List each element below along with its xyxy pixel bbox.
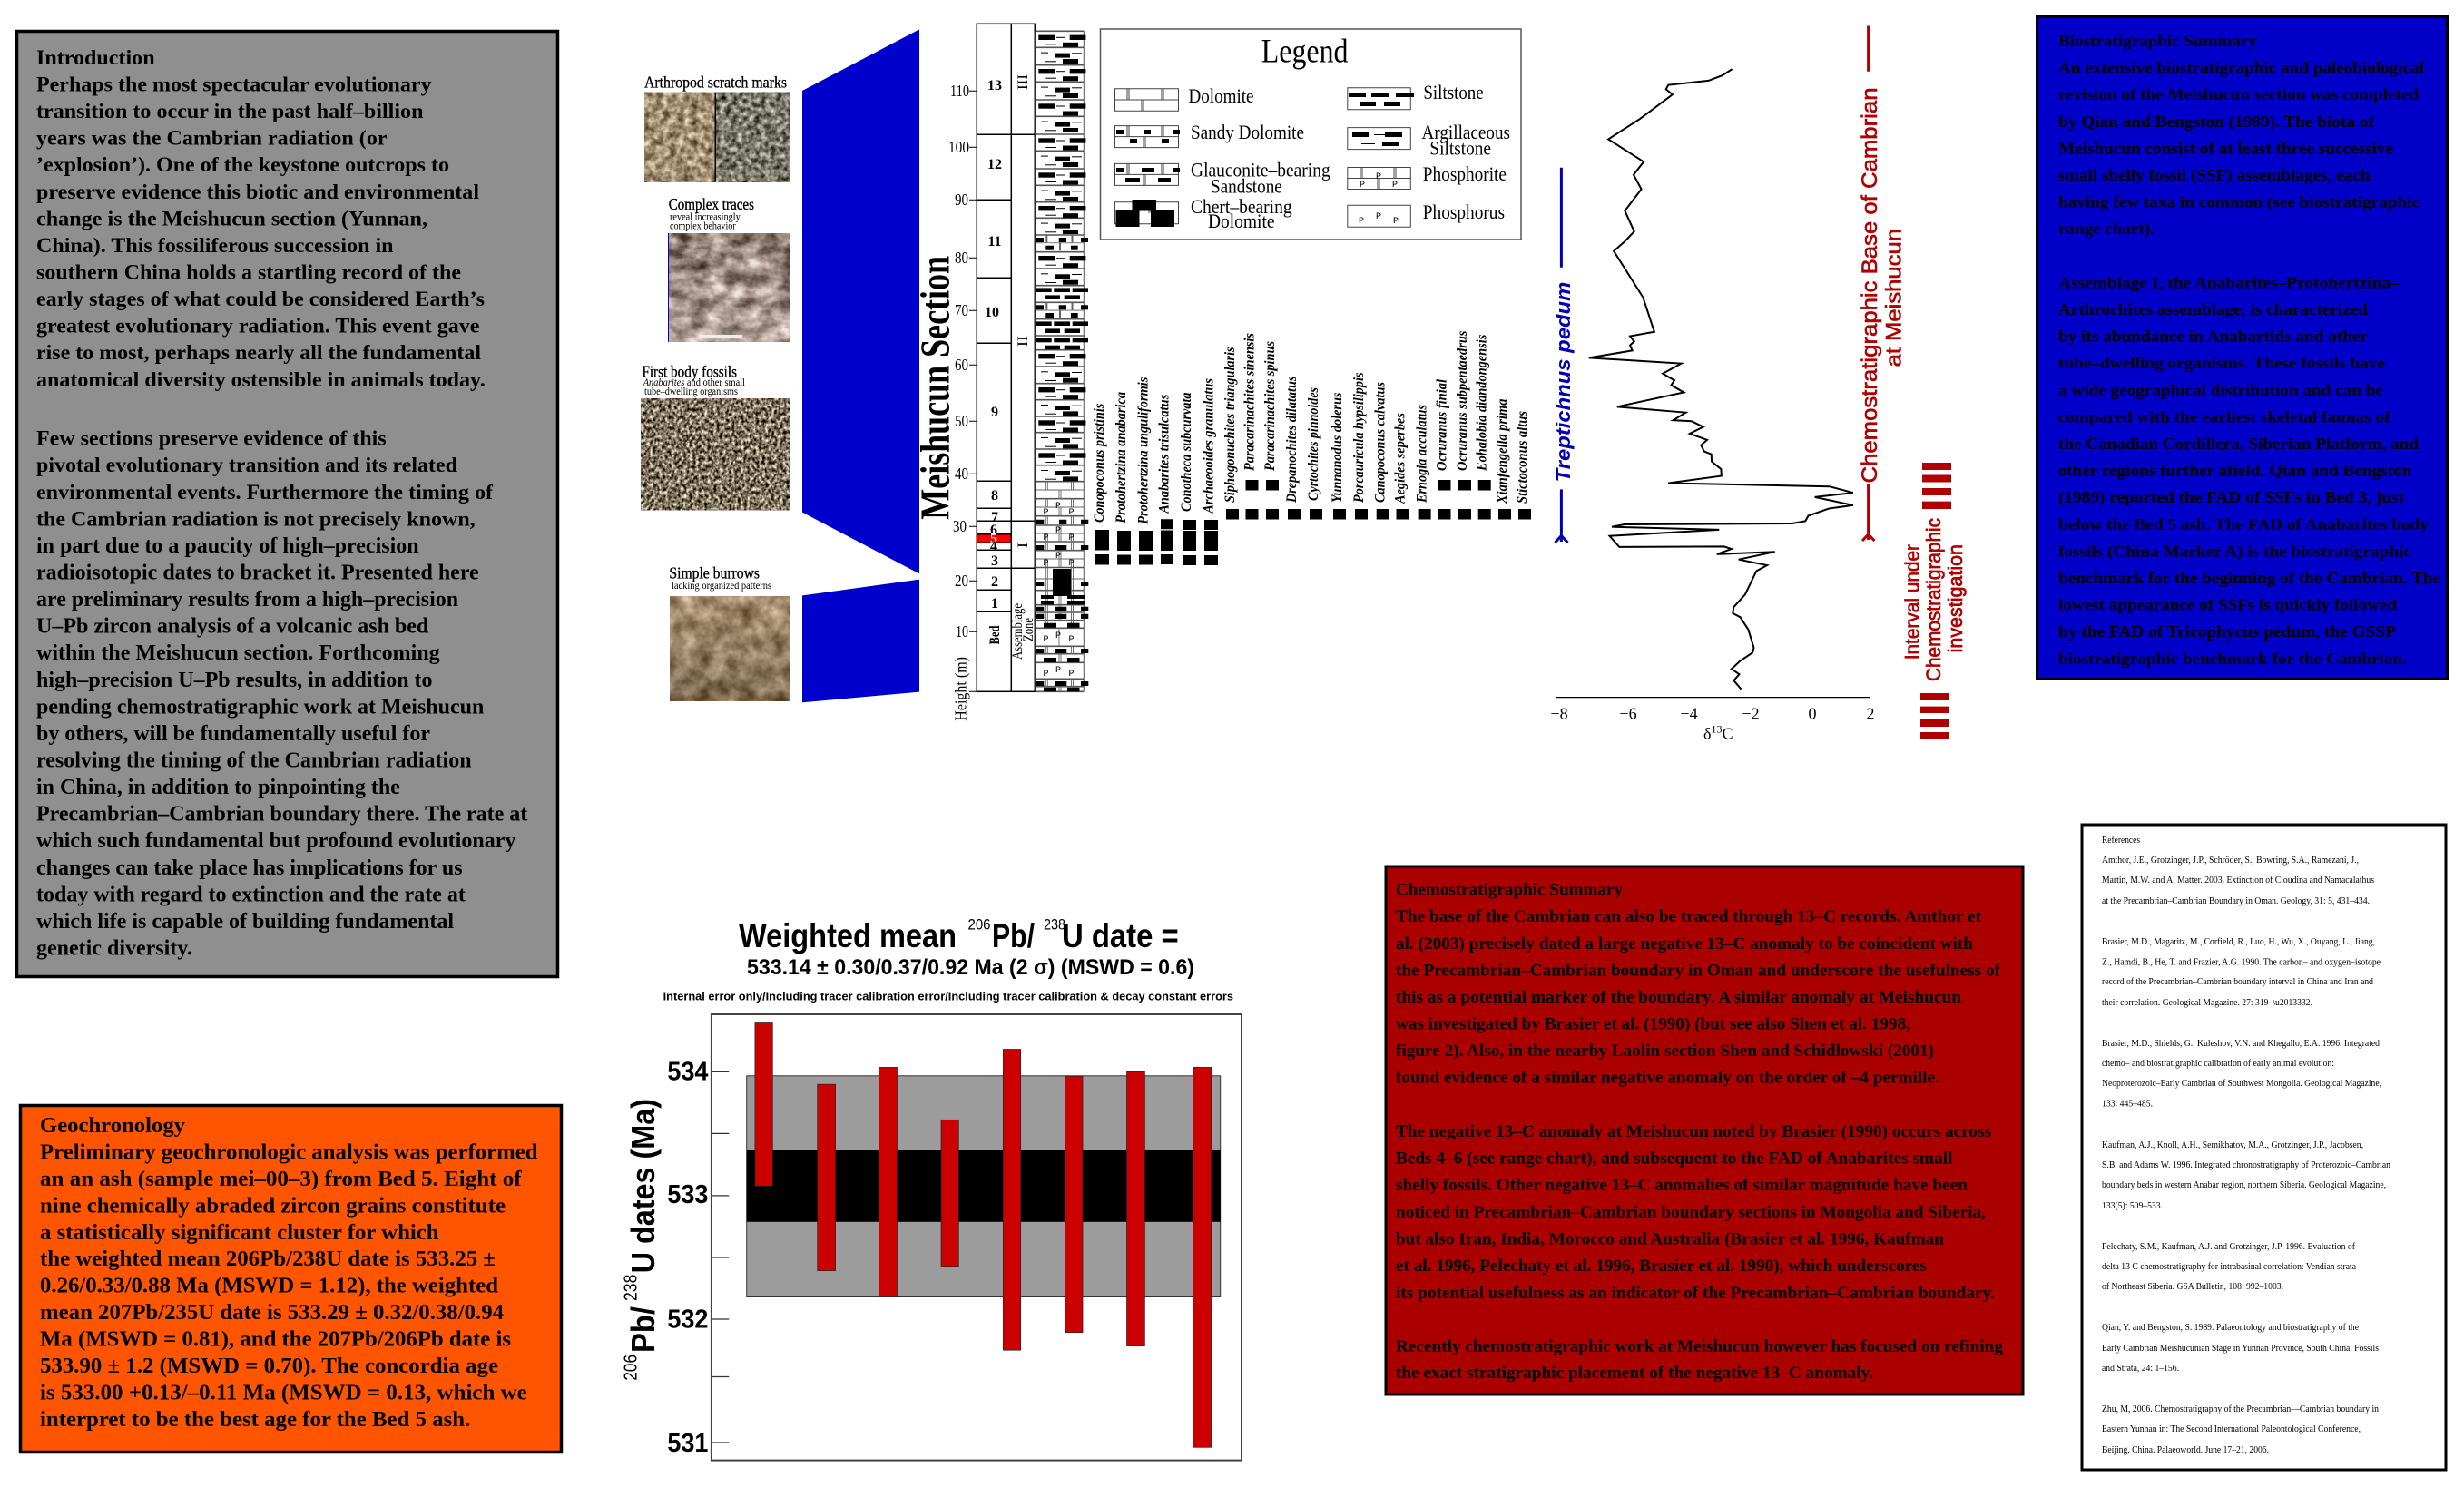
legend labels: Argillaceous [1421,121,1510,143]
text block: geochronology: interpret to be the best age for the Bed 5 ash. [40,1407,470,1432]
text block: biostratigraphic summary: Assemblage I, the Anabarites–Protohertzina– [2058,273,2400,291]
text block: geochronology: nine chemically abraded zircon grains constitute [40,1193,506,1218]
date axis title: 238 [621,1275,641,1301]
lithology phosphate symbols: P [1043,635,1049,645]
text block: introduction paragraphs: changes can take place has implications for us [36,856,463,880]
isotope axis: 13 [1711,723,1722,736]
chart heading: weighted mean date: U date = [1062,917,1179,954]
text block: reference list: Zhu, M, 2006. Chemostratigraphy of the Precambrian––Cambrian boundary in [2102,1404,2379,1414]
text block: geochronology: mean 207Pb/235U date is 533.29 ± 0.32/0.38/0.94 [40,1300,504,1325]
chart: carbon isotope curve [1550,69,1875,743]
zone labels: Zone [1021,618,1036,641]
zone labels: Assemblage [1010,603,1026,660]
range chart: taxa names: Protohertzina unguliformis [1136,377,1151,525]
text block: introduction paragraphs: Precambrian–Cambrian boundary there. The rate at [36,803,527,827]
text block: introduction paragraphs: early stages of what could be considered Earth’s [36,288,485,310]
lithology phosphate symbols: P [1055,526,1061,536]
text block: reference list: Martin, M.W. and A. Matter. 2003. Extinction of Cloudina and Namacalathus [2102,875,2374,885]
bed numbers: 9 [991,405,998,420]
photo: arthropod scratch marks [644,73,790,182]
lithology phosphate symbols: P [1055,552,1061,562]
text block: chemostratigraphic summary: Beds 4–6 (see range chart), and subsequent to the FAD of Anabarites small [1396,1149,1953,1169]
text block: reference list: Neoproterozoic–Early Cambrian of Southwest Mongolia. Geological Magazine, [2102,1078,2381,1089]
text block: geochronology: 533.90 ± 1.2 (MSWD = 0.70). The concordia age [40,1354,498,1378]
chart note: error types: Internal error only/Including tracer calibration error/Including tracer calibration & decay constant errors [663,991,1233,1003]
text block: geochronology: the weighted mean 206Pb/238U date is 533.25 ± [40,1247,496,1271]
legend labels: Sandy Dolomite [1191,121,1304,143]
text block: chemostratigraphic summary: this as a potential marker of the boundary. A similar anomaly at Meishucun [1396,988,1961,1007]
isotope axis: C [1722,725,1733,743]
text block: chemostratigraphic summary: et al. 1996, Pelechaty et al. 1996, Brasier et al. 1990), which underscores [1396,1257,1927,1276]
range chart: taxa names: Porcauricula hypsilippis [1351,373,1367,504]
range chart: taxa names: Stictoconus altus [1515,411,1530,504]
isotope axis: −4 [1680,704,1698,722]
column header: bed: Bed [987,625,1003,644]
lithology phosphate symbols: P [1055,666,1061,676]
legend labels: Dolomite [1189,84,1254,107]
text block: reference list: Pelechaty, S.M., Kaufman, A.J. and Grotzinger, J.P. 1996. Evaluation of [2102,1241,2355,1252]
text block: biostratigraphic summary: other regions further afield. Qian and Bengston [2058,462,2412,480]
text block: introduction paragraphs: are preliminary results from a high–precision [36,588,458,611]
range chart: taxa names: Drepanochites dilatatus [1284,377,1300,504]
text block: introduction paragraphs [36,73,527,960]
isotope axis: −6 [1619,704,1637,722]
2-sigma gray band [747,1076,1221,1297]
lithology phosphate symbols: P [1043,533,1049,543]
text block: introduction paragraphs: change is the Meishucun section (Yunnan, [36,207,427,230]
date axis ticks and labels [667,1057,729,1458]
text block: biostratigraphic summary: (1989) reported the FAD of SSFs in Bed 3, just [2058,488,2404,507]
isotope axis: −2 [1742,704,1760,722]
text block: reference list: 133: 445–485. [2102,1098,2153,1109]
text block: reference list: delta 13 C chemostratigraphy for intrabasinal correlation: Vendian strata [2102,1261,2356,1272]
photo: complex traces: reveal increasingly [670,210,741,223]
text block: chemostratigraphic summary: its potential usefulness as an indicator of the Precambrian–Cambrian boundary. [1396,1284,1995,1303]
text block: reference list: their correlation. Geological Magazine. 27: 319–\u2013332. [2102,997,2312,1008]
chart heading: weighted mean date [739,916,1179,954]
text block: chemostratigraphic summary: The base of the Cambrian can also be traced through 13–C records. Amthor et [1396,907,1982,926]
text block: introduction paragraphs: today with regard to extinction and the rate at [36,883,466,906]
panel: introduction [16,31,557,976]
zone labels: II [1016,336,1031,347]
date axis title: 206 [621,1355,641,1381]
date axis ticks and labels: 533 [667,1180,708,1209]
text block: reference list: Early Cambrian Meishucunian Stage in Yunnan Province, South China. Fossils [2102,1343,2379,1354]
text block: chemostratigraphic summary: Recently chemostratigraphic work at Meishucun however has focused on refining [1396,1337,2003,1356]
photo: first body fossils: Anabarites and other small [643,376,746,388]
heading: introduction: Introduction [36,46,155,69]
legend labels: Siltstone [1429,137,1491,160]
height axis ticks and labels: 110 [950,82,969,100]
text block: reference list: Brasier, M.D., Shields, G., Kuleshov, V.N. and Khegallo, E.A. 1996. Integrated [2102,1038,2380,1049]
annotation: interval under investigation [1901,463,1967,739]
isotope axis: 0 [1808,704,1817,722]
lithology phosphate symbols: P [1043,670,1049,680]
stratigraphic column: beds and zones [948,24,1036,721]
height axis ticks and labels: 30 [953,517,967,535]
chart heading: weighted mean date: 238 [1044,916,1065,933]
text block: introduction paragraphs: Perhaps the most spectacular evolutionary [36,73,432,96]
height axis ticks and labels: 40 [955,465,968,483]
zircon date error bars [755,1023,1212,1447]
text block: biostratigraphic summary: Arthrochites assemblage, is characterized [2058,300,2368,318]
axis label: height: Height (m) [952,657,971,721]
range chart: taxa names: Xianfengella prima [1495,399,1510,504]
text block: introduction paragraphs: pending chemostratigraphic work at Meishucun [36,695,484,719]
text block: introduction paragraphs: genetic diversity. [36,936,192,960]
range chart: taxa names: Conopoconus pristinis [1092,404,1107,523]
range chart: occurrence squares [1095,480,1531,565]
text block: reference list: Kaufman, A.J., Knoll, A.H., Semikhatov, M.A., Grotzinger, J.P., Jacobsen, [2102,1140,2363,1150]
range chart: taxa names: Canopoconus calvatus [1373,382,1389,503]
text block: reference list: and Strata, 24: 1–156. [2102,1363,2179,1374]
text block: introduction paragraphs: U–Pb zircon analysis of a volcanic ash bed [36,615,429,639]
connector: Cambrian interval wedge [802,29,919,573]
isotope axis: 2 [1866,704,1875,722]
text block: introduction paragraphs: pivotal evolutionary transition and its related [36,454,457,476]
text block: reference list: record of the Precambrian–Cambrian boundary interval in China and Iran and [2102,976,2373,987]
height axis ticks and labels [948,82,977,691]
text block: introduction paragraphs: environmental events. Furthermore the timing of [36,481,493,504]
range chart: taxa names: Eohalobia diandongensis [1475,335,1490,472]
text block: chemostratigraphic summary: the exact stratigraphic placement of the negative 13–C anomaly. [1396,1364,1873,1383]
legend labels: Siltstone [1423,81,1484,103]
date axis title: Pb/ [624,1306,662,1353]
text block: reference list: Z., Hamdi, B., He, T. and Frazier, A.G. 1990. The carbon– and oxygen–isotope [2102,956,2381,967]
text block: biostratigraphic summary: fossils (China Marker A) is the biostratigraphic [2058,542,2411,561]
text block: biostratigraphic summary: range chart). [2058,220,2155,239]
height axis ticks and labels: 10 [956,622,968,641]
range chart: taxa names: Anabarites trisulcatus [1157,395,1173,514]
text block: biostratigraphic summary: having few taxa in common (see biostratigraphic [2058,193,2420,212]
lithology phosphate symbols: P [1068,635,1075,645]
lithology phosphate symbols: P [1055,631,1061,641]
height axis ticks and labels: 90 [955,191,968,209]
legend labels: Chert–bearing [1191,195,1292,218]
text block: reference list: at the Precambrian–Cambrian Boundary in Oman. Geology, 31: 5, 431–434. [2102,895,2370,906]
legend labels: Phosphorite [1423,162,1507,185]
heading: geochronology: Geochronology [40,1113,186,1138]
text block: introduction paragraphs: within the Meishucun section. Forthcoming [36,641,440,665]
range chart: taxa names [1092,331,1530,525]
text block: introduction paragraphs: Few sections preserve evidence of this [36,427,387,450]
bed numbers: 12 [987,157,1002,172]
height axis ticks and labels: 100 [948,138,969,156]
text block: chemostratigraphic summary: shelly fossils. Other negative 13–C anomalies of similar magnitude have been [1396,1176,1968,1195]
text block: biostratigraphic summary: small shelly fossil (SSF) assemblages, each [2058,166,2371,185]
text block: introduction paragraphs: years was the Cambrian radiation (or [36,127,387,150]
range chart: taxa names: Siphogonuchites triangularis [1222,347,1238,503]
date axis title: U dates (Ma) [624,1099,662,1273]
text block: biostratigraphic summary: An extensive biostratigraphic and paleobiological [2058,58,2424,76]
photo: complex traces: Complex traces [669,195,754,213]
bed numbers: 5 [990,532,997,546]
text block: geochronology [40,1140,538,1432]
lithology phosphate symbols: P [1043,508,1049,518]
legend swatches: P [1376,212,1381,222]
legend swatches: P [1392,181,1398,191]
lithology phosphate symbols: P [1055,502,1061,512]
text block: introduction paragraphs: the Cambrian radiation is not precisely known, [36,507,476,530]
photo: simple burrows: lacking organized patterns [672,579,771,592]
annotation: chemostratigraphic base of Cambrian [1858,25,1906,541]
text block: introduction paragraphs: by others, will be fundamentally useful for [36,722,430,746]
text block: introduction paragraphs: resolving the timing of the Cambrian radiation [36,749,472,773]
zone labels: I [1016,543,1031,548]
legend swatches: P [1359,217,1364,227]
connector: lower interval wedge [802,580,919,702]
legend swatches: P [1376,172,1381,182]
text block: geochronology: is 533.00 +0.13/–0.11 Ma (MSWD = 0.13, which we [40,1381,527,1404]
photo: simple burrows: Simple burrows [669,564,760,582]
range chart: taxa names: Ocruranus subpentaedrus [1455,331,1470,471]
range chart: taxa names: Ernogia acculatus [1415,405,1430,504]
text block: biostratigraphic summary: benchmark for the beginning of the Cambrian. The [2058,569,2440,587]
text block: chemostratigraphic summary: figure 2). Also, in the nearby Laolin section Shen and Schidlowski (2001) [1396,1042,1934,1061]
zone labels [1010,74,1036,660]
text block: biostratigraphic summary: by its abundance in Anabartids and other [2058,328,2368,346]
range chart: taxa names: Yunnanodus dolerus [1330,392,1345,503]
photo: arthropod scratch marks: Arthropod scratch marks [644,73,787,92]
text block: biostratigraphic summary: compared with the earliest skeletal faunas of [2058,407,2391,426]
range chart: taxa names: Aegides seperbes [1392,413,1409,504]
bed numbers [985,78,1002,611]
bed numbers: 3 [991,553,998,569]
height axis ticks and labels: 70 [955,301,968,319]
text block: geochronology: a statistically significant cluster for which [40,1220,439,1245]
text block: introduction paragraphs: in China, in addition to pinpointing the [36,776,400,799]
annotation: chemostratigraphic base of Cambrian: Chemostratigraphic Base of Cambrian [1858,87,1882,483]
photo: simple burrows [669,564,790,701]
text block: introduction paragraphs: which such fundamental but profound evolutionary [36,829,515,853]
lithologic column [1036,31,1088,691]
range chart: taxa names: Ocruranus finial [1434,378,1450,471]
bed numbers: 8 [991,488,998,504]
text block: introduction paragraphs: which life is capable of building fundamental [36,910,454,934]
text block: reference list: Eastern Yunnan in: The Second International Paleontological Conference, [2102,1423,2361,1434]
legend labels: Dolomite [1208,210,1274,232]
text block: chemostratigraphic summary: The negative 13–C anomaly at Meishucun noted by Brasier (1990) occurs across [1396,1122,1991,1141]
photo: first body fossils: First body fossils [642,363,737,381]
lithology phosphate symbols: P [1068,533,1075,543]
text block: introduction paragraphs: China). This fossiliferous succession in [36,234,394,257]
annotation: interval under investigation: Chemostratigraphic [1922,518,1945,681]
range chart: taxa names: Cyrtochites pinnoides [1306,387,1321,501]
chart subtitle: date result: 533.14 ± 0.30/0.37/0.92 Ma (2 σ) (MSWD = 0.6) [747,955,1194,980]
date axis ticks and labels: 532 [667,1305,708,1334]
text block: reference list: of Northeast Siberia. GSA Bulletin, 108: 992–1003. [2102,1281,2283,1292]
legend title: Legend [1261,34,1349,71]
date axis ticks and labels: 534 [667,1057,708,1086]
heading: references: References [2102,835,2140,846]
text block: biostratigraphic summary: a wide geographical distribution and can be [2058,381,2383,399]
annotation: interval under investigation: Interval under [1901,544,1924,660]
range chart: taxa names: Paracarinachites spinus [1262,341,1278,472]
annotation: interval under investigation: investigation [1944,544,1967,652]
bed numbers: 10 [985,305,999,320]
lithology phosphate symbols: P [1068,670,1075,680]
range chart: taxa names: Archaeooides granulatus [1201,378,1216,514]
bed numbers: 1 [991,596,998,611]
photo: first body fossils [641,363,790,510]
date axis ticks and labels: 531 [667,1429,708,1458]
text block: biostratigraphic summary: lowest appearance of SSFs is quickly followed [2058,596,2397,614]
legend [1100,29,1521,240]
text block: biostratigraphic summary: below the Bed 5 ash. The FAD of Anabarites body [2058,515,2429,533]
date axis title [621,1099,662,1381]
text block: reference list: boundary beds in western Anabar region, northern Siberia. Geological Magazine, [2102,1179,2386,1190]
legend labels: Phosphorus [1423,201,1505,223]
text block: chemostratigraphic summary: found evidence of a similar negative anomaly on the order of –4 permille. [1396,1069,1939,1088]
text block: introduction paragraphs: in part due to a paucity of high–precision [36,534,419,558]
height axis ticks and labels: 20 [955,572,968,590]
text block: geochronology: Preliminary geochronologic analysis was performed [40,1140,538,1165]
text block: chemostratigraphic summary [1396,907,2003,1383]
annotation: chemostratigraphic base of Cambrian: at Meishucun [1881,229,1906,367]
text block: chemostratigraphic summary: the Precambrian–Cambrian boundary in Oman and underscore the usefulness of [1396,961,2001,980]
height axis ticks and labels: 60 [955,356,968,374]
panel: biostratigraphic summary [2037,16,2447,679]
text block: introduction paragraphs: transition to occur in the past half–billion [36,100,424,122]
height axis ticks and labels: 50 [955,412,968,430]
lithology phosphate symbols: P [1068,559,1075,569]
bed numbers: 2 [991,574,998,590]
range chart: taxa names: Paracarinachites sinensis [1242,333,1258,472]
bed numbers: 11 [987,234,1002,249]
bed numbers: 7 [991,510,998,525]
range chart: taxa names: Conotheca subcurvata [1179,392,1194,512]
legend swatches: P [1393,217,1399,227]
panel: references [2082,825,2446,1470]
text block: chemostratigraphic summary: al. (2003) precisely dated a large negative 13–C anomaly to be coincident with [1396,934,1973,954]
isotope axis: δ [1703,725,1711,743]
text block: biostratigraphic summary: biostratigraphic benchmark for the Cambrian. [2058,650,2407,668]
chart heading: weighted mean date: Pb/ [992,917,1035,954]
mean black band [747,1150,1221,1222]
text block: reference list: Brasier, M.D., Magaritz, M., Corfield, R., Luo, H., Wu, X., Ouyang, L., Jiang, [2102,936,2375,947]
photo: complex traces [668,195,790,342]
text block: reference list: Amthor, J.E., Grotzinger, J.P., Schröder, S., Bowring, S.A., Ramezani, J., [2102,855,2359,866]
bed numbers: 4 [990,539,997,554]
text block: chemostratigraphic summary: but also Iran, India, Morocco and Australia (Brasier et al. 1996, Kaufman [1396,1229,1944,1248]
text block: introduction paragraphs: preserve evidence this biotic and environmental [36,181,479,203]
title: Meishucun Section: Meishucun Section [912,256,957,520]
text block: biostratigraphic summary: revision of the Meishucun section was completed [2058,85,2419,103]
text block: biostratigraphic summary: by the FAD of Tricophycus pedum, the GSSP [2058,622,2396,641]
photo: first body fossils: tube–dwelling organisms [644,385,738,397]
heading: biostratigraphic summary: Biostratigraphic Summary [2058,32,2257,50]
text block: reference list: S.B. and Adams W. 1996. Integrated chronostratigraphy of Proterozoic–Cambrian [2102,1159,2390,1170]
lithology phosphate symbols [1043,502,1075,680]
text block: biostratigraphic summary [2058,58,2440,668]
bed numbers: 13 [987,78,1002,93]
panel: chemostratigraphic summary [1386,866,2023,1394]
legend swatches: P [1360,181,1365,191]
text block: reference list: Qian, Y. and Bengston, S. 1989. Palaeontology and biostratigraphy of the [2102,1322,2359,1333]
text block: reference list: 133(5): 509–533. [2102,1200,2163,1211]
text block: geochronology: 0.26/0.33/0.88 Ma (MSWD = 1.12), the weighted [40,1274,498,1298]
text block: reference list [2102,855,2390,1455]
text block: chemostratigraphic summary: was investigated by Brasier et al. (1990) (but see also Shen et al. 1998, [1396,1014,1910,1034]
text block: introduction paragraphs: radioisotopic dates to bracket it. Presented here [36,561,479,584]
text block: introduction paragraphs: high–precision U–Pb results, in addition to [36,669,433,692]
isotope axis: −8 [1550,704,1568,722]
text block: introduction paragraphs: anatomical diversity ostensible in animals today. [36,368,486,391]
zone labels: III [1016,74,1031,90]
text block: biostratigraphic summary: by Qian and Bengston (1989). The biota of [2058,113,2375,132]
text block: biostratigraphic summary: Meishucun consist of at least three successive [2058,139,2393,157]
text block: reference list: Beijing, China. Palaeoworld. June 17–21, 2006. [2102,1444,2269,1455]
chart: U-Pb weighted mean [621,1014,1242,1461]
photo: complex traces: complex behavior [670,219,736,231]
text block: introduction paragraphs: southern China holds a startling record of the [36,261,461,283]
isotope axis [1550,698,1875,743]
range chart: taxa names: Protohertzina anabarica [1114,392,1129,524]
text block: introduction paragraphs: rise to most, perhaps nearly all the fundamental [36,341,481,364]
panel: geochronology [20,1105,561,1452]
legend labels: Sandstone [1211,175,1282,198]
legend labels [1189,81,1510,232]
heading: chemostratigraphic summary: Chemostratigraphic Summary [1396,881,1623,900]
text block: chemostratigraphic summary: noticed in Precambrian–Cambrian boundary sections in Mongolia and Siberia, [1396,1203,1986,1222]
lithology phosphate symbols: P [1068,508,1075,518]
annotation: Treptichnus pedum range [1552,168,1575,543]
chart heading: weighted mean date: Weighted mean [739,917,957,954]
bed numbers: 6 [990,523,997,538]
height axis ticks and labels: 80 [955,249,968,267]
lithology phosphate symbols: P [1043,559,1049,569]
text block: biostratigraphic summary: tube–dwelling organisms. These fossils have [2058,354,2385,372]
text block: geochronology: an an ash (sample mei–00–3) from Bed 5. Eight of [40,1167,522,1191]
annotation: Treptichnus pedum range: Treptichnus pedum [1552,282,1575,482]
chart heading: weighted mean date: 206 [967,916,991,933]
legend labels: Glauconite–bearing [1191,159,1330,181]
text block: geochronology: Ma (MSWD = 0.81), and the 207Pb/206Pb date is [40,1327,511,1352]
text block: biostratigraphic summary: the Canadian Cordillera, Siberian Platform, and [2058,435,2419,453]
text block: introduction paragraphs: ’explosion’). One of the keystone outcrops to [36,153,449,176]
text block: reference list: chemo– and biostratigraphic calibration of early animal evolution: [2102,1058,2334,1069]
text block: introduction paragraphs: greatest evolutionary radiation. This event gave [36,315,479,338]
legend swatches [1114,88,1414,227]
